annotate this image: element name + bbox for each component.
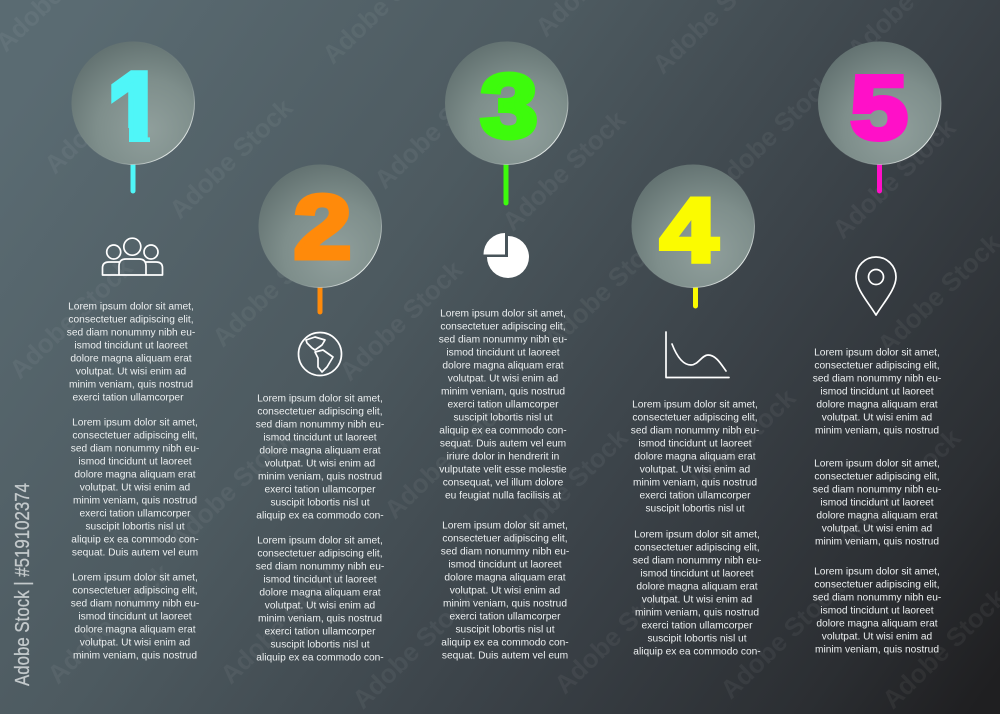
text: step 2: consectetuer adipiscing elit, bbox=[257, 548, 383, 560]
text: step 2: sed diam nonummy nibh eu- bbox=[256, 562, 384, 572]
watermark pattern: Adobe Stock bbox=[826, 112, 962, 245]
text: step 1: dolore magna aliquam erat bbox=[74, 624, 196, 636]
text: step 4: Lorem ipsum dolor sit amet, bbox=[634, 530, 760, 540]
text: step 2: minim veniam, quis nostrud bbox=[258, 614, 382, 624]
text: step 5: Lorem ipsum dolor sit amet, bbox=[814, 348, 940, 358]
text: step 1: exerci tation ullamcorper bbox=[73, 392, 184, 404]
text: step 5: dolore magna aliquam erat bbox=[816, 400, 938, 410]
text: step 3: aliquip ex ea commodo con- bbox=[439, 426, 567, 436]
text: step 2: volutpat. Ut wisi enim ad bbox=[265, 600, 376, 612]
text: step 5: consectetuer adipiscing elit, bbox=[814, 580, 940, 590]
icon: map pin bbox=[856, 257, 896, 315]
text: step 3: iriure dolor in hendrerit in bbox=[447, 452, 559, 462]
text: step 1: dolore magna aliquam erat bbox=[74, 470, 196, 480]
watermark pattern: Adobe Stock bbox=[666, 382, 802, 515]
circle 5 bbox=[818, 42, 941, 164]
watermark pattern: Adobe Stock bbox=[333, 254, 469, 387]
circle 3 bbox=[445, 42, 568, 164]
text: step 4: minim veniam, quis nostrud bbox=[633, 478, 757, 488]
text: step 3: minim veniam, quis nostrud bbox=[441, 386, 565, 398]
panel: step 4 bbox=[631, 164, 761, 658]
text: step 3: vulputate velit esse molestie bbox=[439, 464, 567, 476]
watermark pattern: Adobe Stock bbox=[498, 422, 634, 555]
panel: step 2 bbox=[256, 164, 384, 664]
icon: pie chart bbox=[484, 233, 529, 278]
text: step 2: ismod tincidunt ut laoreet bbox=[263, 574, 377, 586]
text: step 3 bbox=[439, 308, 569, 662]
number 3: 3 bbox=[480, 55, 538, 156]
text: step 2: Lorem ipsum dolor sit amet, bbox=[257, 536, 383, 546]
text: step 1: minim veniam, quis nostrud bbox=[73, 496, 197, 506]
watermark pattern: Adobe Stock bbox=[41, 557, 177, 690]
text: step 3: minim veniam, quis nostrud bbox=[443, 598, 567, 610]
panel: step 5 bbox=[813, 42, 941, 656]
text: step 3: Lorem ipsum dolor sit amet, bbox=[442, 520, 568, 532]
text: step 5 bbox=[813, 348, 941, 656]
number 1: 1 bbox=[107, 49, 164, 176]
text: step 2: dolore magna aliquam erat bbox=[259, 588, 381, 598]
text: step 5: minim veniam, quis nostrud bbox=[815, 536, 939, 548]
text: step 1: ismod tincidunt ut laoreet bbox=[78, 456, 192, 468]
stem 2 bbox=[318, 288, 322, 312]
text: step 1: aliquip ex ea commodo con- bbox=[71, 534, 199, 546]
text: step 3: Lorem ipsum dolor sit amet, bbox=[440, 308, 566, 320]
text: step 5: dolore magna aliquam erat bbox=[816, 618, 938, 630]
text: step 3: ismod tincidunt ut laoreet bbox=[446, 348, 560, 358]
text: step 1: sed diam nonummy nibh eu- bbox=[67, 328, 195, 338]
text: step 1: exerci tation ullamcorper bbox=[80, 508, 191, 520]
watermark pattern: Adobe Stock bbox=[714, 572, 850, 705]
text: step 3: consectetuer adipiscing elit, bbox=[440, 322, 566, 332]
text: step 3: suscipit lobortis nisl ut bbox=[453, 412, 553, 424]
text: step 3: ismod tincidunt ut laoreet bbox=[448, 560, 562, 570]
text: step 1: dolore magna aliquam erat bbox=[70, 354, 192, 364]
text: step 1: Lorem ipsum dolor sit amet, bbox=[72, 572, 198, 584]
text: step 2: volutpat. Ut wisi enim ad bbox=[265, 458, 376, 470]
watermark pattern: Adobe Stock bbox=[163, 422, 299, 555]
icon: line chart bbox=[666, 332, 729, 378]
circle 4 bbox=[632, 164, 754, 288]
text: step 4: ismod tincidunt ut laoreet bbox=[638, 438, 752, 450]
text: step 5: consectetuer adipiscing elit, bbox=[814, 472, 940, 482]
circle 1 bbox=[72, 42, 194, 164]
circle 2 bbox=[258, 164, 382, 288]
number 4: 4 bbox=[660, 179, 718, 280]
text: step 5: dolore magna aliquam erat bbox=[816, 510, 938, 522]
icon: globe bbox=[298, 332, 342, 376]
text: step 3: sed diam nonummy nibh eu- bbox=[441, 546, 569, 558]
text: step 4 bbox=[631, 400, 761, 658]
side credit: Adobe Stock number: Adobe Stock | #519102374 bbox=[11, 483, 34, 686]
text: step 4: sed diam nonummy nibh eu- bbox=[631, 426, 759, 436]
text: step 3: exerci tation ullamcorper bbox=[448, 400, 559, 410]
text: step 5: volutpat. Ut wisi enim ad bbox=[822, 632, 933, 642]
text: step 2: sed diam nonummy nibh eu- bbox=[256, 420, 384, 430]
text: step 5: ismod tincidunt ut laoreet bbox=[820, 498, 934, 508]
text: step 5: consectetuer adipiscing elit, bbox=[814, 360, 940, 372]
text: step 1: volutpat. Ut wisi enim ad bbox=[76, 366, 187, 378]
text: step 5: minim veniam, quis nostrud bbox=[815, 426, 939, 436]
text: step 3: sequat. Duis autem vel eum bbox=[440, 438, 566, 450]
text: step 5: sed diam nonummy nibh eu- bbox=[813, 374, 941, 384]
text: step 1: suscipit lobortis nisl ut bbox=[85, 522, 185, 532]
text: step 3: consequat, vel illum dolore bbox=[443, 478, 564, 488]
text: step 4: dolore magna aliquam erat bbox=[636, 582, 758, 592]
text: step 2: suscipit lobortis nisl ut bbox=[270, 498, 370, 508]
text: step 3: sequat. Duis autem vel eum bbox=[442, 650, 568, 662]
text: step 3: volutpat. Ut wisi enim ad bbox=[450, 586, 561, 596]
text: step 1: sequat. Duis autem vel eum bbox=[72, 548, 198, 558]
text: step 1: ismod tincidunt ut laoreet bbox=[74, 340, 188, 352]
text: step 1: ismod tincidunt ut laoreet bbox=[78, 612, 192, 622]
watermark pattern: Adobe Stock bbox=[38, 47, 174, 180]
text: step 1: volutpat. Ut wisi enim ad bbox=[80, 638, 191, 648]
stem 4 bbox=[693, 288, 698, 306]
text: step 1: consectetuer adipiscing elit, bbox=[72, 430, 198, 442]
text: step 5: sed diam nonummy nibh eu- bbox=[813, 484, 941, 496]
panel: step 3 bbox=[439, 42, 569, 662]
text: step 2: dolore magna aliquam erat bbox=[259, 446, 381, 456]
text: step 3: sed diam nonummy nibh eu- bbox=[439, 334, 567, 346]
text: step 1: Lorem ipsum dolor sit amet, bbox=[72, 418, 198, 428]
text: step 2: aliquip ex ea commodo con- bbox=[256, 510, 384, 522]
text: step 5: ismod tincidunt ut laoreet bbox=[820, 606, 934, 616]
text: step 4: volutpat. Ut wisi enim ad bbox=[642, 594, 753, 606]
text: step 5: minim veniam, quis nostrud bbox=[815, 644, 939, 656]
text: step 4: consectetuer adipiscing elit, bbox=[634, 542, 760, 554]
text: step 5: Lorem ipsum dolor sit amet, bbox=[814, 458, 940, 470]
watermark pattern: Adobe Stock bbox=[214, 557, 350, 690]
watermark pattern: Adobe Stock bbox=[496, 104, 632, 237]
text: step 4: sed diam nonummy nibh eu- bbox=[633, 556, 761, 566]
watermark pattern: Adobe Stock bbox=[368, 62, 504, 195]
text: step 2: suscipit lobortis nisl ut bbox=[270, 640, 370, 650]
watermark pattern: Adobe Stock bbox=[163, 92, 299, 225]
text: step 3: exerci tation ullamcorper bbox=[450, 612, 561, 622]
text: step 1: sed diam nonummy nibh eu- bbox=[71, 444, 199, 454]
text: step 2: exerci tation ullamcorper bbox=[265, 626, 376, 638]
watermark pattern: Adobe Stock bbox=[548, 567, 684, 700]
text: step 5: sed diam nonummy nibh eu- bbox=[813, 592, 941, 604]
text: step 1 bbox=[67, 302, 199, 662]
text: step 4: exerci tation ullamcorper bbox=[642, 620, 753, 632]
text: step 1: consectetuer adipiscing elit, bbox=[72, 586, 198, 596]
stem 1 bbox=[130, 165, 136, 191]
text: step 2: exerci tation ullamcorper bbox=[265, 484, 376, 496]
text: step 4: suscipit lobortis nisl ut bbox=[647, 634, 747, 644]
number 5: 5 bbox=[850, 57, 908, 158]
text: step 5: volutpat. Ut wisi enim ad bbox=[822, 524, 933, 534]
text: step 4: suscipit lobortis nisl ut bbox=[645, 504, 745, 514]
text: step 3: volutpat. Ut wisi enim ad bbox=[448, 374, 559, 384]
text: step 3: eu feugiat nulla facilisis at bbox=[445, 490, 561, 502]
stem 5 bbox=[877, 165, 882, 191]
text: step 2: minim veniam, quis nostrud bbox=[258, 472, 382, 482]
text: step 5: ismod tincidunt ut laoreet bbox=[820, 386, 934, 398]
watermark pattern: Adobe Stock bbox=[831, 422, 967, 555]
text: step 3: aliquip ex ea commodo con- bbox=[441, 638, 569, 648]
text: step 2: consectetuer adipiscing elit, bbox=[257, 406, 383, 418]
number 2: 2 bbox=[294, 176, 351, 277]
text: step 2: ismod tincidunt ut laoreet bbox=[263, 432, 377, 444]
text: step 3: dolore magna aliquam erat bbox=[444, 572, 566, 584]
panel: step 1 bbox=[67, 42, 199, 662]
watermark pattern: Adobe Stock bbox=[538, 222, 674, 355]
icon: people bbox=[102, 238, 162, 275]
text: step 4: ismod tincidunt ut laoreet bbox=[640, 568, 754, 580]
text: step 1: consectetuer adipiscing elit, bbox=[68, 314, 194, 326]
text: step 4: exerci tation ullamcorper bbox=[640, 490, 751, 502]
text: step 1: minim veniam, quis nostrud bbox=[69, 380, 193, 390]
watermark pattern: Adobe Stock bbox=[704, 67, 840, 200]
text: step 1: volutpat. Ut wisi enim ad bbox=[80, 482, 191, 494]
text: step 2: Lorem ipsum dolor sit amet, bbox=[257, 394, 383, 404]
text: step 1: Lorem ipsum dolor sit amet, bbox=[68, 302, 194, 312]
text: step 2 bbox=[256, 394, 384, 664]
text: step 4: consectetuer adipiscing elit, bbox=[632, 412, 758, 424]
text: step 4: dolore magna aliquam erat bbox=[634, 452, 756, 462]
text: step 3: suscipit lobortis nisl ut bbox=[455, 624, 555, 636]
text: step 4: minim veniam, quis nostrud bbox=[635, 608, 759, 618]
text: step 4: aliquip ex ea commodo con- bbox=[633, 646, 761, 658]
watermark pattern: Adobe Stock bbox=[378, 392, 514, 525]
watermark pattern: Adobe Stock bbox=[206, 220, 342, 353]
watermark pattern: Adobe Stock bbox=[3, 252, 139, 385]
text: step 5: Lorem ipsum dolor sit amet, bbox=[814, 566, 940, 578]
text: step 3: dolore magna aliquam erat bbox=[442, 360, 564, 372]
text: step 5: volutpat. Ut wisi enim ad bbox=[822, 412, 933, 424]
text: step 3: consectetuer adipiscing elit, bbox=[442, 534, 568, 544]
text: step 1: sed diam nonummy nibh eu- bbox=[71, 598, 199, 610]
text: step 1: minim veniam, quis nostrud bbox=[73, 650, 197, 662]
text: step 2: aliquip ex ea commodo con- bbox=[256, 652, 384, 664]
text: step 4: volutpat. Ut wisi enim ad bbox=[640, 464, 751, 476]
text: step 4: Lorem ipsum dolor sit amet, bbox=[632, 400, 758, 410]
watermark pattern: Adobe Stock bbox=[346, 582, 482, 714]
stem 3 bbox=[504, 165, 508, 203]
